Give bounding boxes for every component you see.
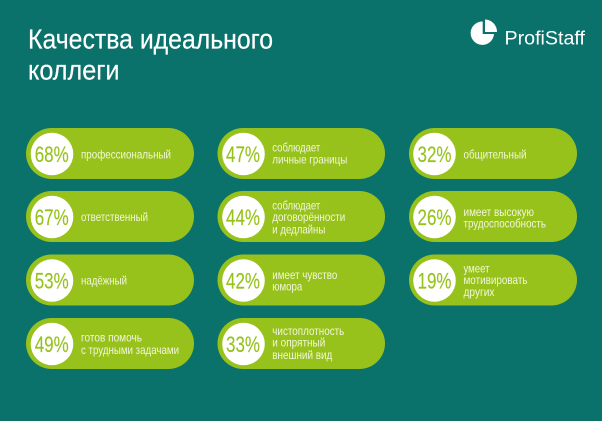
item: 33%: 33% xyxy=(226,332,260,357)
item: 49%: 49% xyxy=(35,332,69,357)
item: 44%: 44% xyxy=(226,205,260,230)
item: 68% xyxy=(26,128,194,179)
item: 49%: готов помочь xyxy=(81,331,142,345)
logo wordmark: ProfiStaff xyxy=(504,28,586,50)
item: 19%: мотивировать xyxy=(464,273,528,287)
item: 33%: внешний вид xyxy=(272,348,332,362)
item: 19% xyxy=(409,254,577,306)
item: 42%: имеет чувство xyxy=(272,268,338,282)
item: 42%: юмора xyxy=(272,280,303,294)
item: 53% xyxy=(26,254,194,306)
item: 19%: других xyxy=(464,285,495,299)
item: 68%: профессиональный xyxy=(81,148,171,162)
title: Качества идеального xyxy=(28,24,273,54)
item: 44%: соблюдает xyxy=(272,198,321,212)
item: 44% xyxy=(218,191,385,242)
item: 53%: 53% xyxy=(35,268,69,294)
title xyxy=(28,24,273,86)
item: 67% xyxy=(26,191,194,242)
logo: ProfiStaff xyxy=(471,20,586,50)
item: 32%: 32% xyxy=(418,142,452,167)
item: 44%: договорённости xyxy=(272,210,345,224)
item: 42% xyxy=(218,254,385,306)
item: 26%: трудоспособность xyxy=(464,216,546,230)
item: 67%: 67% xyxy=(35,205,69,230)
item: 67%: ответственный xyxy=(81,210,148,224)
item: 68%: 68% xyxy=(35,142,69,167)
item: 53%: надёжный xyxy=(81,274,127,288)
icon: pie chart xyxy=(471,20,497,45)
item: 32%: общительный xyxy=(464,148,526,162)
item: 33% xyxy=(218,318,385,369)
item: 26% xyxy=(409,191,577,242)
item: 26%: имеет высокую xyxy=(464,205,534,219)
item: 44%: и дедлайны xyxy=(272,222,325,236)
item: 42%: 42% xyxy=(226,268,260,294)
item: 49% xyxy=(26,318,194,369)
item: 47% xyxy=(218,128,385,179)
item: 47%: личные границы xyxy=(272,152,347,166)
item: 19%: 19% xyxy=(418,268,452,294)
item: 49%: с трудными задачами xyxy=(81,343,179,357)
item: 47%: 47% xyxy=(226,142,260,167)
item: 19%: умеет xyxy=(464,262,490,276)
item: 33%: и опрятный xyxy=(272,336,325,350)
item: 32% xyxy=(409,128,577,179)
item: 33%: чистоплотность xyxy=(272,324,344,338)
item: 26%: 26% xyxy=(418,205,452,230)
title: коллеги xyxy=(28,54,120,86)
item: 47%: соблюдает xyxy=(272,141,321,155)
